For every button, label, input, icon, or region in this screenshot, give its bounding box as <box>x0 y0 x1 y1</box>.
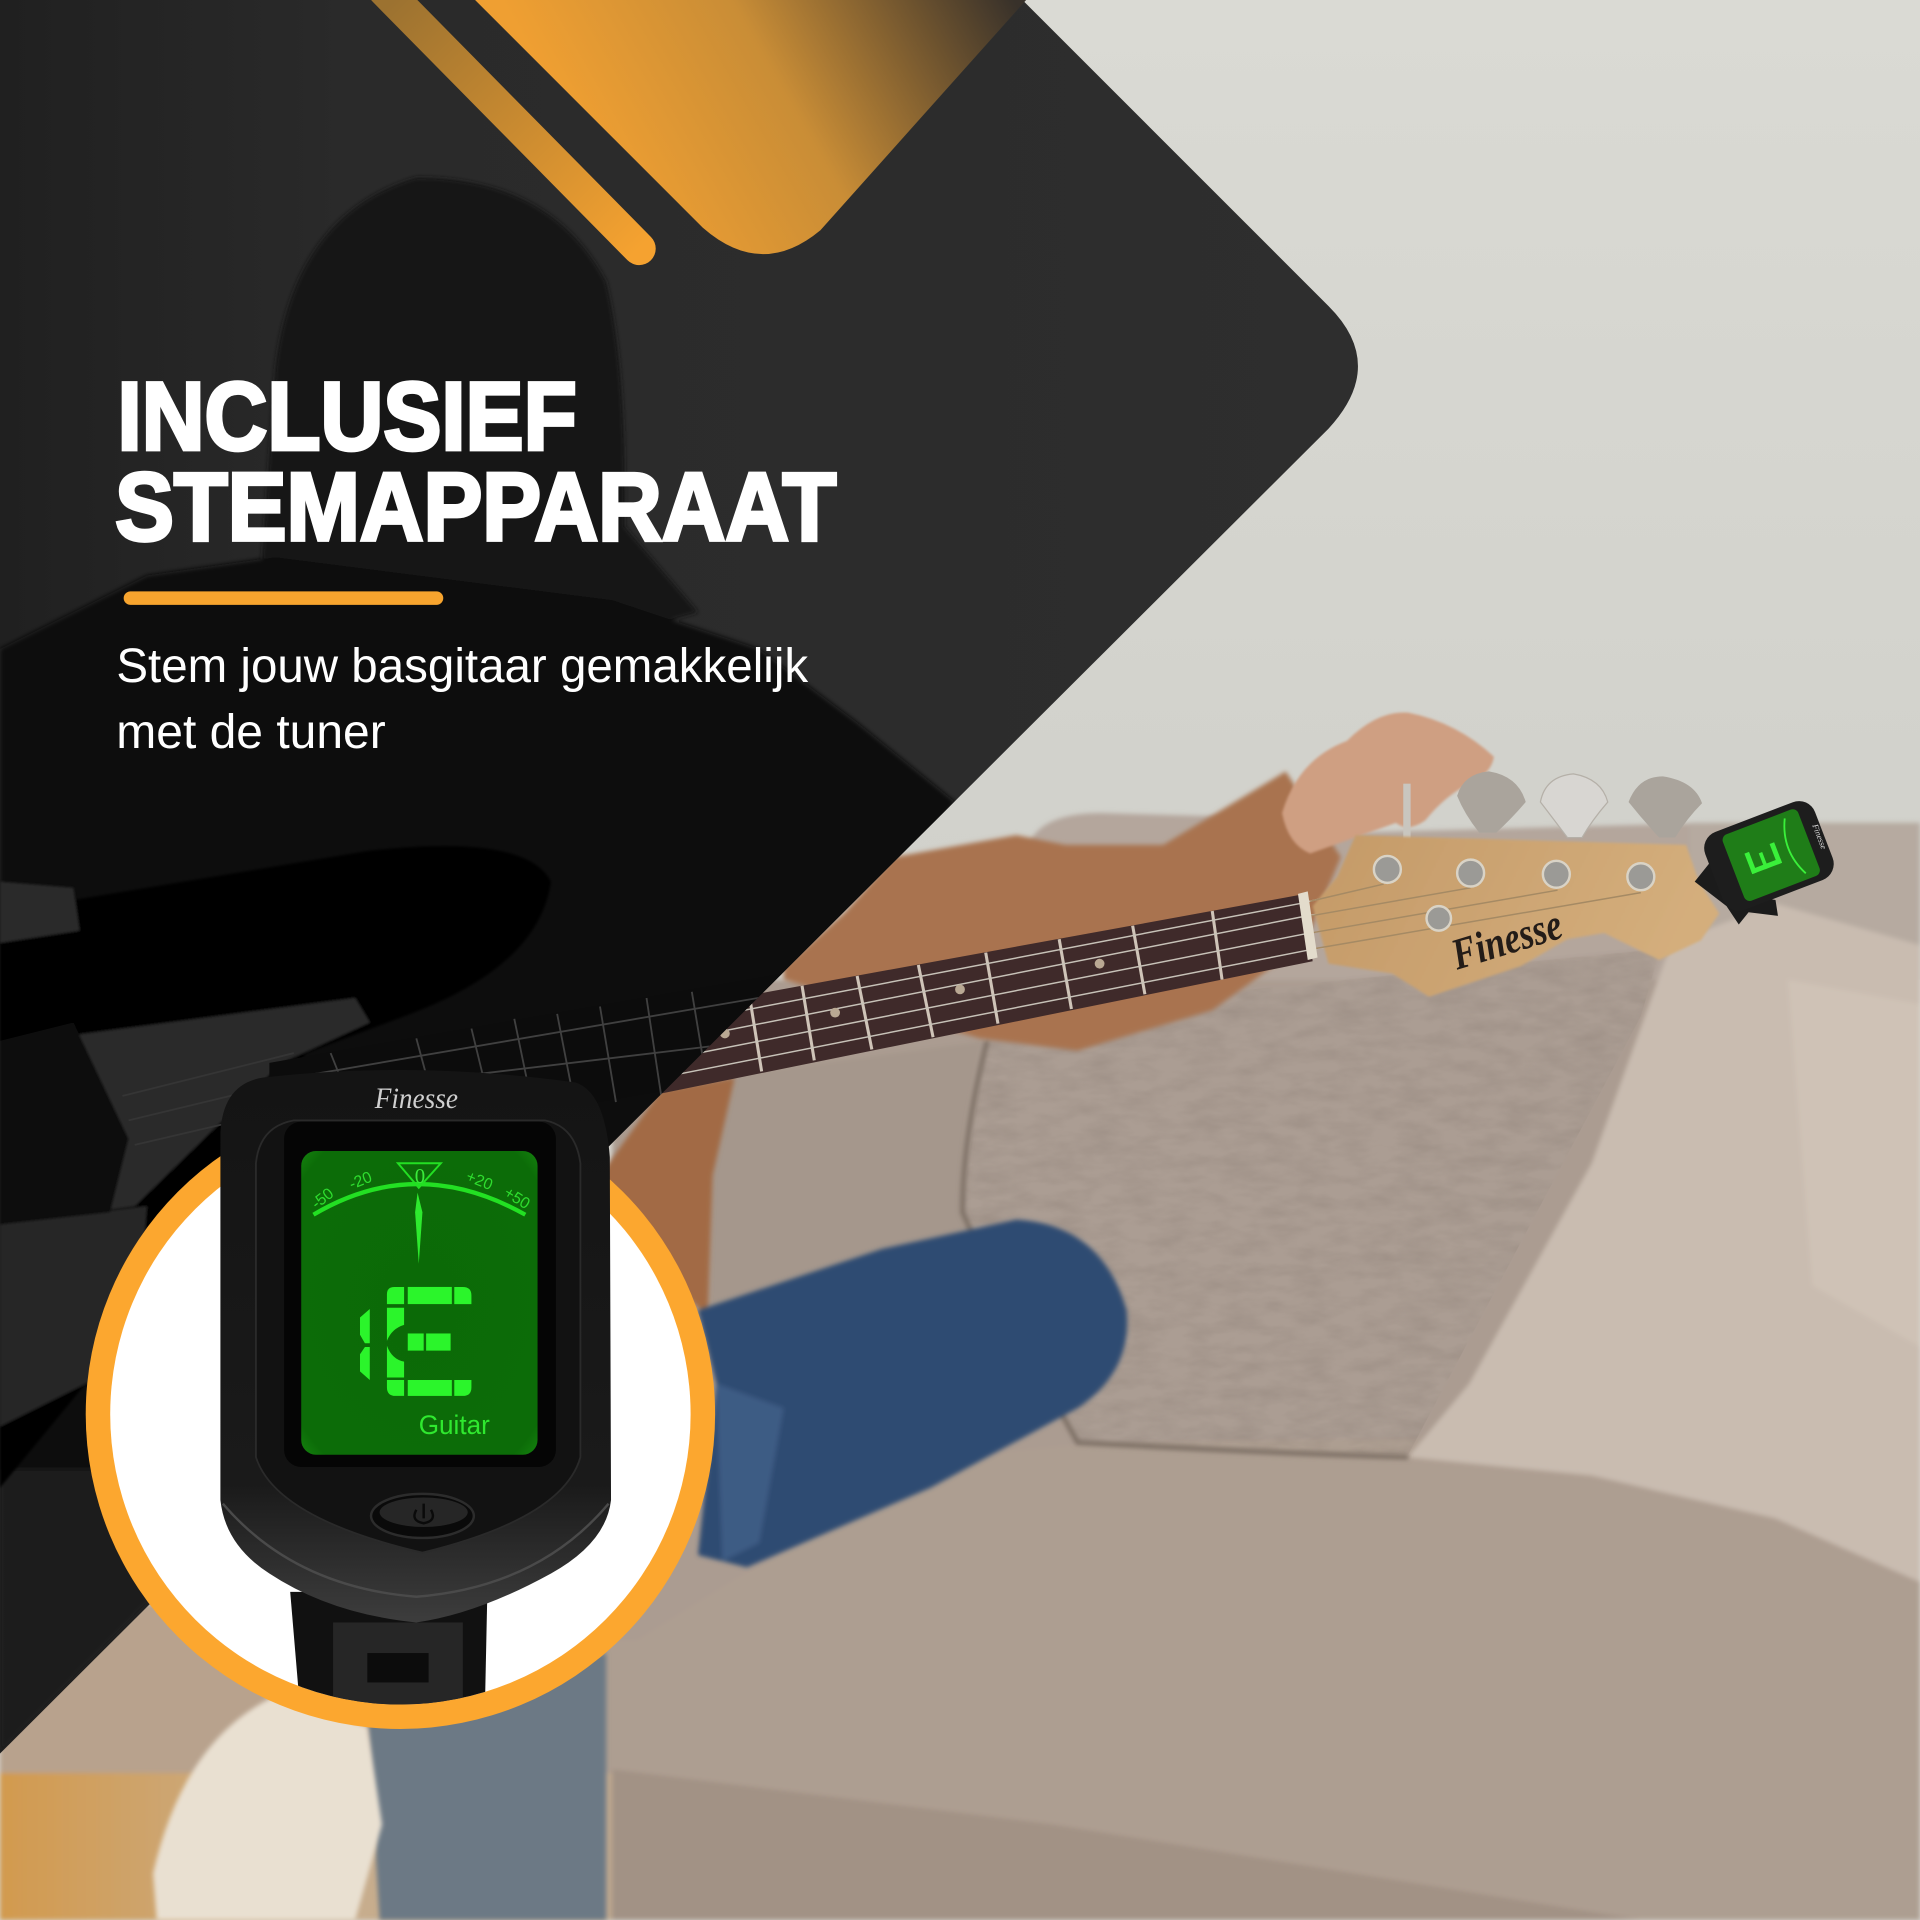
scale labels <box>309 1168 533 1213</box>
background photo: sofa and player <box>0 710 1920 1920</box>
wall <box>0 0 1920 980</box>
zero marker <box>398 1163 441 1188</box>
headstock logo: Finesse <box>1445 900 1568 980</box>
title <box>115 362 836 561</box>
dark diagonal panel with darkened photo <box>0 0 1396 1763</box>
subtitle: met de tuner <box>116 706 386 759</box>
string lines over headstock <box>1310 884 1641 949</box>
sweater <box>600 771 1341 1316</box>
needle <box>415 1193 422 1264</box>
scale labels: -20 <box>347 1169 375 1193</box>
tuner logo: Finesse <box>374 1083 458 1115</box>
sofa and floor <box>0 813 1920 1920</box>
mini tuner on headstock <box>1695 796 1839 924</box>
orange divider <box>124 591 443 605</box>
tuner clip <box>290 1592 487 1708</box>
sock <box>153 1696 382 1920</box>
headstock <box>1313 835 1719 997</box>
darkened player silhouette <box>0 178 955 1753</box>
bass neck <box>661 884 1641 1093</box>
title: STEMAPPARAAT <box>115 453 836 561</box>
instrument label: Guitar <box>419 1410 490 1440</box>
subtitle: Stem jouw basgitaar gemakkelijk <box>116 640 808 693</box>
raised bezel outline <box>256 1120 580 1553</box>
subtitle <box>116 640 808 759</box>
tuning pegs <box>1403 771 1702 839</box>
scale labels: -50 <box>309 1185 337 1213</box>
black screen surround <box>284 1122 556 1467</box>
nut <box>1298 891 1318 960</box>
sofa fabric texture <box>979 970 1645 1452</box>
darkened neck and frets <box>122 973 808 1145</box>
darkened bass body <box>0 846 551 1488</box>
product circle <box>86 1100 715 1729</box>
hand on tuning peg <box>1282 712 1494 853</box>
scale arc <box>313 1184 525 1215</box>
tuner body shell <box>220 1070 611 1622</box>
LCD screen <box>301 1151 538 1455</box>
note E segments <box>360 1287 471 1396</box>
machine heads <box>1374 856 1654 931</box>
panel base <box>0 0 1396 1763</box>
scale labels: +20 <box>464 1168 495 1194</box>
zero digit: 0 <box>415 1164 425 1188</box>
power button <box>371 1494 474 1538</box>
mini tuner on headstock: Finesse <box>1810 822 1829 851</box>
title: INCLUSIEF <box>118 362 577 470</box>
orange gradient shape at top <box>475 0 1026 254</box>
cushion seams <box>962 1041 1408 1457</box>
jeans <box>367 1220 1127 1920</box>
orange diagonal stripe <box>384 0 639 249</box>
tuner product <box>220 1070 611 1708</box>
scale labels: +50 <box>501 1184 533 1213</box>
lower shell highlight <box>223 1504 609 1597</box>
